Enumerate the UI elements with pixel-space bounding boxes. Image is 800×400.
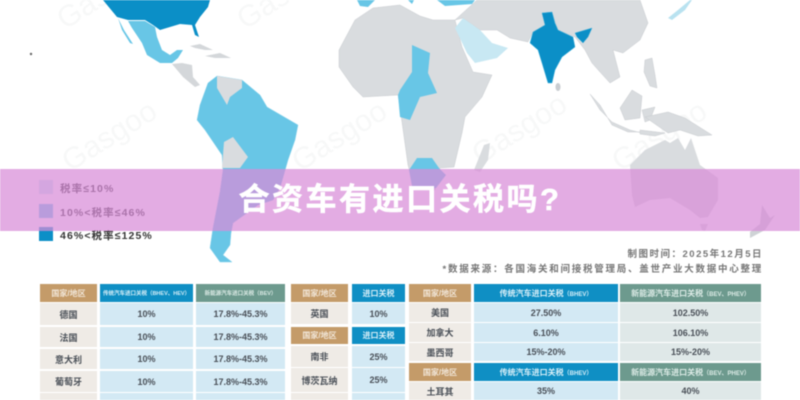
title banner xyxy=(0,169,800,231)
table: Europe: 国家/地区 xyxy=(51,288,86,298)
table: UK and Africa: 博茨瓦纳 xyxy=(301,376,338,386)
legend label: mid: 10%<税率≤46% xyxy=(60,207,146,219)
table: Europe: 10% xyxy=(137,332,156,342)
table: Americas and Turkey: 加拿大 xyxy=(426,328,454,338)
table: Americas and Turkey: 土耳其 xyxy=(426,386,454,396)
Venezuela and Bolivia xyxy=(217,76,248,168)
table: Europe: 葡萄牙 xyxy=(55,377,82,387)
table: Americas and Turkey xyxy=(408,283,762,400)
table: UK and Africa: 国家/地区 xyxy=(302,331,337,340)
table: Europe: 新能源汽车进口关税（BEV） xyxy=(205,291,276,297)
table: Americas and Turkey: （BHEV） xyxy=(564,370,592,376)
table: Europe: 10% xyxy=(137,354,156,364)
watermarks: Gasgoo xyxy=(466,87,573,171)
table: Americas and Turkey: 传统汽车进口关税 xyxy=(500,368,564,376)
table: Europe: 传统汽车进口关税（BHEV、HEV） xyxy=(103,291,190,297)
Sri Lanka xyxy=(556,83,560,91)
table: UK and Africa xyxy=(290,283,406,400)
table: UK and Africa: 进口关税 xyxy=(362,288,394,298)
table: Europe xyxy=(39,283,286,400)
table: Americas and Turkey: 106.10% xyxy=(673,328,708,338)
table: Europe: 10% xyxy=(137,376,156,386)
South America xyxy=(197,76,298,262)
table: Americas and Turkey: 国家/地区 xyxy=(423,288,457,298)
table: Americas and Turkey: 传统汽车进口关税 xyxy=(500,288,564,298)
table: Americas and Turkey: 国家/地区 xyxy=(423,368,457,376)
table: Americas and Turkey: 27.50% xyxy=(531,308,561,318)
India xyxy=(530,12,592,83)
table: Europe: 17.8%-45.3% xyxy=(213,332,268,342)
legend swatch: low xyxy=(39,180,53,194)
Chad and central corridor xyxy=(398,45,437,120)
table: Americas and Turkey: 40% xyxy=(681,386,700,396)
table: Europe: 17.8%-45.3% xyxy=(213,354,268,364)
table: Americas and Turkey: 新能源汽车进口关税 xyxy=(631,288,703,298)
table: UK and Africa: 25% xyxy=(369,375,388,385)
table: UK and Africa: 进口关税 xyxy=(362,331,394,340)
watermarks: Gasgoo xyxy=(56,94,163,178)
legend label: high: 46%<税率≤125% xyxy=(60,230,153,242)
table: Europe: 德国 xyxy=(59,310,78,320)
table: UK and Africa: 英国 xyxy=(310,309,328,319)
Australia xyxy=(630,138,718,231)
table: Americas and Turkey: 15%-20% xyxy=(671,347,710,357)
watermarks xyxy=(51,0,713,178)
table: Americas and Turkey: 6.10% xyxy=(533,328,559,338)
watermarks: Gasgoo xyxy=(286,94,393,178)
New Zealand xyxy=(750,205,775,238)
table: Europe: 10% xyxy=(137,309,156,319)
table: UK and Africa: 南非 xyxy=(310,352,328,362)
table: UK and Africa: 25% xyxy=(369,352,388,362)
table: Europe: 意大利 xyxy=(55,354,82,364)
legend swatch: mid xyxy=(39,204,53,218)
Africa xyxy=(339,5,492,190)
table: Americas and Turkey: 美国 xyxy=(431,308,449,318)
watermarks: Gasgoo xyxy=(606,94,713,178)
table: Americas and Turkey: 墨西哥 xyxy=(426,348,454,358)
title: 合资车有进口关税吗? xyxy=(239,182,561,217)
legend xyxy=(38,180,153,242)
table: UK and Africa: 国家/地区 xyxy=(302,288,337,298)
table: Europe: 17.8%-45.3% xyxy=(213,309,268,319)
table: Americas and Turkey: （BEV、PHEV） xyxy=(703,292,750,298)
table: Americas and Turkey: 15%-20% xyxy=(526,347,566,357)
Central America and Caribbean xyxy=(30,44,231,87)
table: Europe: 17.8%-45.3% xyxy=(213,376,268,386)
table: Europe: 法国 xyxy=(59,332,78,342)
table: Americas and Turkey: （BHEV） xyxy=(564,292,592,298)
South Africa xyxy=(409,158,446,190)
Eurasia xyxy=(455,0,712,136)
date note: 制图时间：2025年12月5日 xyxy=(628,249,763,260)
table: Americas and Turkey: 新能源汽车进口关税 xyxy=(631,368,703,376)
table: Americas and Turkey: 102.50% xyxy=(673,308,708,318)
Madagascar xyxy=(474,143,490,172)
Turkey and Europe xyxy=(357,0,475,7)
Japan xyxy=(668,0,692,20)
Mexico xyxy=(118,18,183,63)
source note: *数据来源：各国海关和间接税管理局、盖世产业大数据中心整理 xyxy=(443,264,763,275)
legend swatch: high xyxy=(39,227,53,241)
table: Americas and Turkey: （BEV、PHEV） xyxy=(703,370,750,376)
table: Americas and Turkey: 35% xyxy=(537,386,555,396)
legend label: low: 税率≤10% xyxy=(60,183,114,195)
Saudi Arabia xyxy=(455,18,508,63)
table: UK and Africa: 10% xyxy=(369,308,388,318)
USA xyxy=(103,0,210,37)
